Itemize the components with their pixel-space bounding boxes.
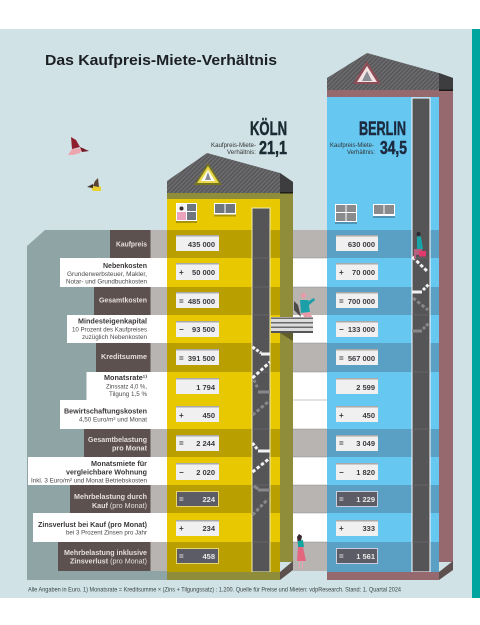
values: Köln: − bbox=[179, 325, 184, 334]
values: Köln: = bbox=[179, 439, 184, 448]
label: Mindesteigenkapital: Mindesteigenkapital bbox=[78, 318, 147, 326]
label: Monatsrate: Tilgung 1,5 % bbox=[109, 392, 148, 398]
label: Gesamtkosten: Gesamtkosten bbox=[99, 298, 147, 304]
label: Nebenkosten bbox=[60, 258, 167, 287]
icon: Berlin dormer bbox=[353, 61, 381, 84]
values: Köln: 2 244 bbox=[196, 439, 216, 448]
values: Berlin: 567 000 bbox=[348, 354, 375, 363]
Köln base side bbox=[280, 561, 293, 580]
label: Monatsrate: Zinssatz 4,0 %, bbox=[106, 384, 147, 390]
Köln window bbox=[214, 203, 236, 216]
Berlin staircase bbox=[412, 98, 430, 572]
values: Köln bbox=[176, 235, 219, 564]
label: Kreditsumme: Kreditsumme bbox=[101, 354, 147, 361]
values: Berlin: 450 bbox=[362, 411, 375, 420]
label: Bewirtschaftungskosten bbox=[60, 400, 167, 429]
values: Berlin: 133 000 bbox=[348, 325, 375, 334]
values: Köln: 1 794 bbox=[196, 383, 216, 392]
heading: Berlin: Kaufpreis-Miete- bbox=[330, 143, 374, 149]
values: Berlin: + bbox=[339, 411, 344, 420]
icon: man on bridge bbox=[294, 293, 315, 317]
middle strip rows bbox=[293, 230, 327, 571]
building: Köln bbox=[167, 153, 293, 580]
heading: Köln: 21,1 bbox=[259, 138, 287, 158]
values: Köln: 2 020 bbox=[196, 468, 215, 477]
values: Köln: 450 bbox=[202, 411, 215, 420]
label: Gesamtbelastung: pro Monat bbox=[112, 446, 148, 452]
heading: Köln: Verhältnis: bbox=[227, 150, 256, 156]
values: Berlin: = bbox=[339, 297, 344, 306]
values: Berlin: 333 bbox=[362, 524, 375, 533]
values: Berlin: = bbox=[339, 495, 344, 504]
heading: Köln: KÖLN bbox=[250, 119, 287, 140]
Köln window with person bbox=[176, 203, 197, 223]
label: Mehrbelastung durch Kauf: Mehrbelastung durch bbox=[74, 494, 147, 501]
label: Gesamtbelastung bbox=[84, 429, 167, 457]
label: Zinsverlust: Zinsverlust bei Kauf (pro Monat) bbox=[38, 522, 147, 529]
Köln base bbox=[167, 572, 280, 580]
values: Köln: + bbox=[179, 411, 184, 420]
row labels bbox=[28, 230, 167, 571]
icon: yellow bird bbox=[87, 178, 101, 191]
label: Kaufpreis bbox=[110, 230, 167, 258]
label: Mehrbelastung durch Kauf bbox=[70, 485, 167, 513]
values: Köln: 435 000 bbox=[188, 240, 215, 249]
Berlin base side bbox=[439, 561, 453, 580]
heading: Berlin bbox=[330, 119, 407, 158]
values: Berlin bbox=[336, 235, 378, 564]
left grey band bbox=[27, 230, 167, 580]
label: Kreditsumme bbox=[96, 343, 167, 372]
values: Berlin: 1 561 bbox=[356, 552, 375, 561]
Berlin roof corner bbox=[439, 73, 453, 90]
values: Berlin: + bbox=[339, 524, 344, 533]
values: Berlin: = bbox=[339, 354, 344, 363]
label: Nebenkosten: Nebenkosten bbox=[103, 263, 147, 270]
values: Berlin: 1 820 bbox=[356, 468, 375, 477]
values: Berlin: 70 000 bbox=[352, 268, 375, 277]
Berlin roof bbox=[327, 53, 453, 90]
row divider lines bbox=[150, 258, 327, 542]
label: Mindesteigenkapital bbox=[67, 315, 167, 343]
values: Köln: = bbox=[179, 297, 184, 306]
Berlin window large bbox=[335, 204, 357, 224]
Berlin base bbox=[327, 572, 439, 580]
values: Berlin: 2 599 bbox=[356, 383, 375, 392]
values: Berlin: = bbox=[339, 439, 344, 448]
values: Berlin: − bbox=[339, 325, 344, 334]
Berlin darker floors bbox=[327, 230, 439, 572]
label: Nebenkosten: Grunderwerbsteuer, Makler, bbox=[67, 272, 147, 278]
icon: woman with book bbox=[297, 534, 306, 569]
heading: Köln: Kaufpreis-Miete- bbox=[211, 143, 256, 149]
values: Köln: = bbox=[179, 552, 184, 561]
values: Berlin: 1 229 bbox=[356, 495, 375, 504]
values: Köln: 458 bbox=[202, 552, 215, 561]
label: Bewirtschaftungskosten: Bewirtschaftungskosten bbox=[64, 408, 147, 416]
Berlin side wall bbox=[439, 90, 453, 562]
values: Köln: 224 bbox=[202, 495, 216, 504]
label: Gesamtbelastung: Gesamtbelastung bbox=[88, 437, 147, 444]
heading: Berlin: Verhältnis: bbox=[347, 150, 375, 156]
label: Mehrbelastung inklusive: Mehrbelastung inklusive bbox=[64, 550, 147, 557]
values: Köln: = bbox=[179, 495, 184, 504]
Köln roof corner bbox=[280, 173, 293, 193]
icon: woman with bag on stairs bbox=[414, 232, 426, 259]
label: Mehrbelastung inklusive: Zinsverlust (pro Monat) bbox=[70, 558, 147, 566]
label: Mehrbelastung inklusive bbox=[58, 542, 167, 571]
icon: Köln dormer bbox=[194, 163, 222, 185]
values: Köln: 234 bbox=[202, 524, 216, 533]
Köln staircase bbox=[252, 208, 270, 572]
values: Köln: = bbox=[179, 354, 184, 363]
teal side bar bbox=[472, 29, 480, 598]
values: Köln: 50 000 bbox=[192, 268, 215, 277]
label: Nebenkosten: Notar- und Grundbuchkosten bbox=[66, 280, 147, 286]
values: Berlin: − bbox=[339, 468, 344, 477]
Köln cornice bbox=[167, 193, 293, 199]
heading: Berlin: 34,5 bbox=[380, 138, 407, 158]
Berlin cornice bbox=[327, 90, 453, 97]
label: Zinsverlust: bei 3 Prozent Zinsen pro Jahr bbox=[66, 530, 147, 536]
values: Berlin: 630 000 bbox=[348, 240, 375, 249]
values: Berlin: + bbox=[339, 268, 344, 277]
title: Das Kaufpreis-Miete-Verhältnis bbox=[45, 52, 277, 69]
values: Köln: 485 000 bbox=[188, 297, 215, 306]
label: Monatsmiete: Monatsmiete für bbox=[91, 461, 147, 468]
values: Köln: 93 500 bbox=[192, 325, 215, 334]
building: Berlin bbox=[327, 53, 453, 580]
icon: red bird bbox=[68, 137, 89, 155]
label: Mehrbelastung durch Kauf: Kauf (pro Monat) bbox=[92, 503, 147, 510]
Köln front wall bbox=[167, 198, 280, 572]
values: Berlin: 3 049 bbox=[356, 439, 375, 448]
values: Berlin: = bbox=[339, 552, 344, 561]
label: Monatsrate bbox=[86, 372, 167, 400]
label: Gesamtkosten bbox=[94, 287, 167, 315]
Berlin window small bbox=[373, 204, 395, 218]
label: Kaufpreis: Kaufpreis bbox=[116, 242, 147, 248]
label: Monatsmiete: vergleichbare Wohnung bbox=[66, 470, 147, 476]
values: Köln: + bbox=[179, 268, 184, 277]
values: Köln: − bbox=[179, 468, 184, 477]
Köln side wall bbox=[280, 192, 293, 562]
Berlin front wall bbox=[327, 97, 439, 572]
values: Berlin: 700 000 bbox=[348, 297, 375, 306]
label: Bewirtschaftungskosten: 4,50 Euro/m² und Monat bbox=[79, 418, 147, 424]
Köln darker floors bbox=[167, 230, 280, 572]
values: Köln: + bbox=[179, 524, 184, 533]
label: Zinsverlust bbox=[33, 513, 167, 542]
footnote: Alle Angaben in Euro. 1) Monatsrate = Kreditsumme × (Zins + Tilgungssatz) : 1.200. Quelle für Preise und Mieten: vdpResearch. Stand: 1. Quartal 2024 bbox=[28, 588, 402, 594]
bridge between buildings bbox=[271, 317, 313, 341]
values: Köln: 391 500 bbox=[188, 354, 215, 363]
heading: Berlin: BERLIN bbox=[359, 119, 406, 140]
Köln roof bbox=[167, 153, 293, 193]
heading: Köln bbox=[211, 119, 287, 158]
label: Monatsmiete: Inkl. 3 Euro/m² und Monat Betriebskosten bbox=[31, 478, 147, 484]
label: Monatsmiete bbox=[28, 457, 167, 485]
label: Monatsrate: Monatsrate¹⁾ bbox=[104, 374, 147, 382]
label: Mindesteigenkapital: zuzüglich Nebenkosten bbox=[82, 335, 147, 341]
label: Mindesteigenkapital: 10 Prozent des Kaufpreises bbox=[72, 328, 147, 334]
